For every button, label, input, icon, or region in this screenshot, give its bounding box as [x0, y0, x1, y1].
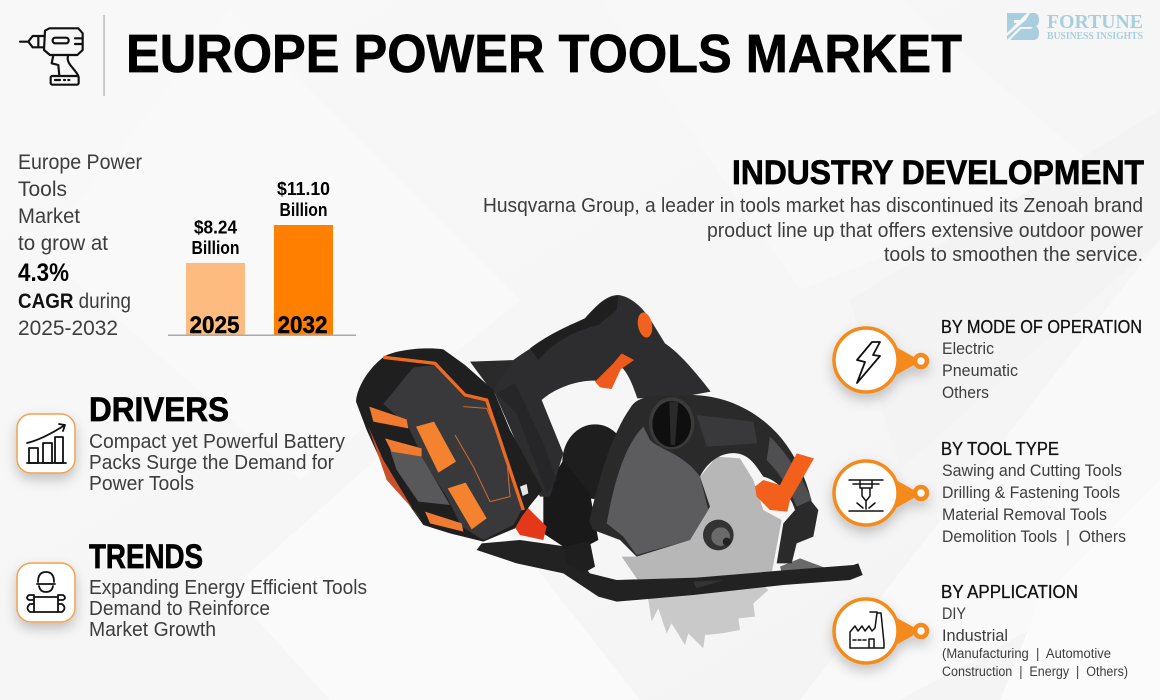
- heading: INDUSTRY DEVELOPMENT: [732, 154, 1144, 192]
- panel: by tool type: [834, 439, 1126, 546]
- list: Sawing and Cutting Tools: [942, 461, 1122, 480]
- text block: CAGR summary: CAGR during: [18, 290, 131, 313]
- text block: Power Tools: [89, 473, 194, 495]
- list: Pneumatic: [942, 361, 1018, 380]
- text block: CAGR summary: [18, 151, 142, 340]
- text block: Husqvarna Group, a leader in tools market has discontinued its Zenoah brand: [483, 195, 1143, 217]
- icon: lightning bolt: [834, 328, 927, 392]
- list: (Manufacturing | Automotive: [942, 646, 1111, 661]
- list: Drilling & Fastening Tools: [942, 483, 1120, 502]
- panel: industry development: [483, 154, 1144, 266]
- logo: Fortune Business Insights: BUSINESS INSIGHTS: [1047, 31, 1143, 42]
- logo: Fortune Business Insights: [1007, 11, 1143, 42]
- text block: CAGR summary: Europe Power: [18, 151, 142, 174]
- list: Demolition Tools | Others: [942, 527, 1126, 546]
- heading: BY APPLICATION: [941, 582, 1078, 602]
- text block: tools to smoothen the service.: [884, 244, 1143, 266]
- text block: CAGR summary: Market: [18, 205, 80, 228]
- text block: CAGR summary: 4.3%: [18, 259, 69, 287]
- text block: product line up that offers extensive outdoor power: [707, 220, 1143, 242]
- bar chart: market size: 2025: [190, 312, 240, 339]
- list: [942, 604, 1128, 679]
- text block: CAGR summary: 2025-2032: [18, 317, 118, 340]
- heading: DRIVERS: [89, 391, 229, 429]
- product image: circular saw: [356, 295, 863, 648]
- text block: Market Growth: [89, 619, 216, 641]
- list: Construction | Energy | Others): [942, 664, 1128, 679]
- text block: CAGR summary: to grow at: [18, 232, 108, 255]
- bar chart: market size: Billion: [192, 238, 240, 258]
- bar chart: market size: Billion: [280, 200, 328, 220]
- text block: Compact yet Powerful Battery: [89, 431, 345, 453]
- text block: [89, 577, 367, 641]
- text block: Packs Surge the Demand for: [89, 452, 334, 474]
- bar chart: market size: $8.24: [194, 218, 237, 238]
- icon: engineer with blueprint: [17, 563, 75, 622]
- panel: drivers: [17, 391, 345, 495]
- icon: rising bar chart: [17, 414, 75, 473]
- heading: BY TOOL TYPE: [941, 439, 1059, 459]
- panel: by application: [834, 582, 1128, 679]
- list: [942, 339, 1018, 402]
- bar chart: market size: [168, 179, 356, 339]
- text block: Expanding Energy Efficient Tools: [89, 577, 367, 599]
- heading: BY MODE OF OPERATION: [941, 317, 1142, 337]
- list: Material Removal Tools: [942, 505, 1107, 524]
- bar chart: market size: 2032: [278, 312, 328, 339]
- bar chart: market size: $11.10: [277, 179, 330, 199]
- list: Industrial: [942, 626, 1008, 645]
- panel: trends: [17, 538, 367, 641]
- icon: factory: [834, 599, 927, 663]
- list: Others: [942, 383, 989, 402]
- icon: power drill: [20, 28, 83, 85]
- text block: [483, 195, 1143, 266]
- panel: by mode of operation: [834, 317, 1142, 402]
- icon: laser cutter: [834, 461, 927, 525]
- text block: CAGR summary: Tools: [18, 178, 67, 201]
- heading: TRENDS: [89, 538, 203, 576]
- list: [942, 461, 1126, 546]
- logo: Fortune Business Insights: FORTUNE: [1047, 11, 1143, 33]
- text block: [89, 431, 345, 495]
- text block: Demand to Reinforce: [89, 598, 270, 620]
- title: EUROPE POWER TOOLS MARKET: [126, 24, 962, 84]
- list: DIY: [942, 604, 966, 623]
- list: Electric: [942, 339, 994, 358]
